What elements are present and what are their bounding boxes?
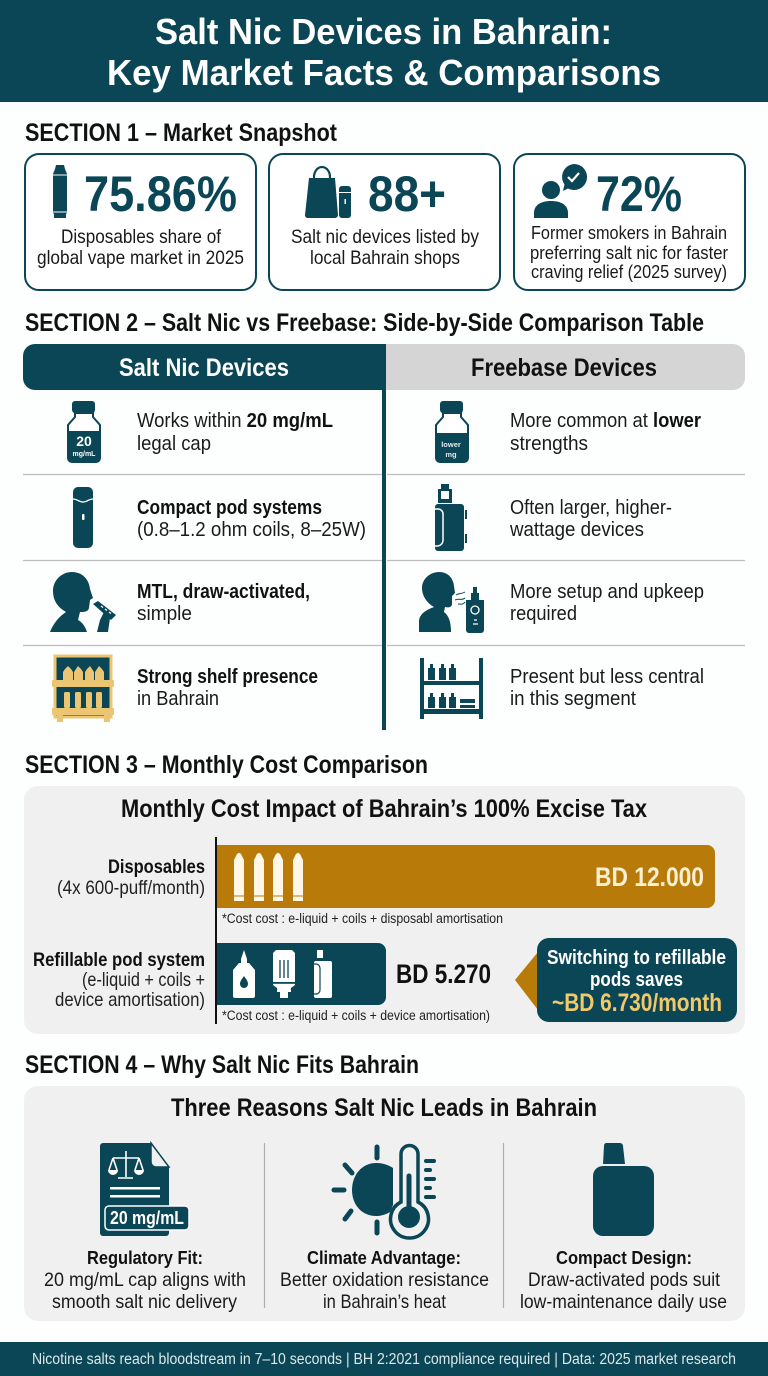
panel: monthly cost chart: [24, 786, 745, 1034]
icon: regulation document: 20 mg/mL: [110, 1208, 184, 1228]
row 1 freebase: icon bottle lower mg: mg: [445, 450, 457, 459]
reason text: compact design: [520, 1247, 727, 1313]
title banner: [0, 0, 768, 102]
row 1 freebase: text: [510, 409, 701, 455]
comparison table: [23, 344, 745, 730]
row 1 salt: icon bottle 20 mg/mL: mg/mL: [73, 451, 96, 458]
row 4 freebase: text: [510, 665, 704, 710]
heading: section 1: SECTION 1 – Market Snapshot: [25, 119, 338, 147]
column header: freebase: [386, 344, 745, 390]
row 4 salt: text: in Bahrain: [137, 687, 219, 710]
label: disposables: (4x 600-puff/month): [57, 877, 205, 899]
bar: disposables BD 12.000: [217, 845, 715, 908]
row 2 freebase: text: wattage devices: [509, 518, 644, 541]
panel: stat former smokers: [514, 154, 745, 290]
chart title: Monthly Cost Impact of Bahrain’s 100% Excise Tax: [121, 795, 647, 823]
row 1 salt: icon bottle 20 mg/mL: [68, 401, 100, 462]
row 1 salt: icon bottle 20 mg/mL: 20: [76, 433, 92, 449]
row 1 freebase: text: More common at lower: [510, 409, 701, 432]
panel title: Three Reasons Salt Nic Leads in Bahrain: [171, 1094, 597, 1122]
description: preferring salt nic for faster: [530, 242, 728, 263]
row 2 salt: icon pod: [73, 487, 93, 548]
row 2 salt: text: [137, 496, 366, 541]
reason text: compact design: Compact Design:: [556, 1247, 692, 1268]
icon: compact device: [593, 1143, 654, 1236]
row 1 freebase: icon bottle lower mg: [436, 401, 468, 462]
reason text: climate advantage: Climate Advantage:: [307, 1247, 461, 1268]
description: [530, 222, 728, 282]
row 2 salt: text: (0.8–1.2 ohm coils, 8–25W): [137, 518, 366, 541]
stat: 88+: 88+: [368, 166, 446, 222]
reason text: regulatory fit: Regulatory Fit:: [87, 1247, 203, 1268]
description: global vape market in 2025: [37, 247, 244, 269]
label: refillable pod system: [33, 949, 205, 1011]
row 3 freebase: icon person exhaling with mod: [419, 572, 484, 633]
row 3 freebase: text: More setup and upkeep: [510, 580, 704, 603]
row 1 salt: text: legal cap: [137, 432, 211, 455]
icon: disposable vape: [53, 165, 67, 218]
row 4 salt: text: [137, 665, 318, 710]
description: craving relief (2025 survey): [531, 261, 727, 282]
callout: savings: ~BD 6.730/month: [552, 989, 722, 1017]
label: refillable pod system: Refillable pod system: [33, 949, 205, 971]
row 4 salt: icon gold shelf: [52, 656, 114, 722]
reason text: regulatory fit: 20 mg/mL cap aligns with: [44, 1269, 246, 1291]
reason text: regulatory fit: smooth salt nic delivery: [52, 1291, 237, 1313]
icon: shopping bag with device: [305, 167, 351, 218]
title banner: Salt Nic Devices in Bahrain:: [155, 11, 612, 52]
description: Former smokers in Bahrain: [531, 222, 727, 243]
label: disposables: Disposables: [108, 856, 205, 878]
row 3 salt: text: MTL, draw-activated,: [137, 580, 310, 603]
row 3 salt: text: simple: [137, 602, 192, 625]
row 2 salt: text: Compact pod systems: [137, 496, 322, 519]
column header: salt nic: [23, 344, 386, 390]
title banner: Key Market Facts & Comparisons: [107, 52, 661, 93]
icon: e-liquid bottle: [233, 950, 255, 998]
callout: savings: Switching to refillable: [547, 947, 726, 969]
footnote: disposables: *Cost cost : e-liquid + coils + disposabl amortisation: [222, 911, 503, 926]
column header: freebase: Freebase Devices: [471, 354, 657, 382]
row 1 salt: text: [137, 409, 333, 455]
row 1 freebase: icon bottle lower mg: lower: [441, 440, 461, 449]
column header: salt nic: Salt Nic Devices: [119, 354, 289, 382]
row 3 salt: icon person with pod: [50, 572, 116, 632]
footnote: refillable: *Cost cost : e-liquid + coils + device amortisation): [222, 1008, 490, 1023]
row 2 freebase: text: Often larger, higher-: [510, 496, 672, 519]
row 3 salt: text: [137, 580, 310, 625]
row 4 freebase: text: in this segment: [510, 687, 636, 710]
callout: savings: pods saves: [590, 969, 683, 991]
row 1 freebase: text: strengths: [510, 432, 588, 455]
label: disposables: [57, 856, 205, 899]
value: BD 5.270: BD 5.270: [396, 959, 491, 989]
reason text: climate advantage: [280, 1247, 489, 1313]
stat: 72%: 72%: [596, 166, 682, 222]
stat: 75.86%: 75.86%: [84, 166, 237, 222]
description: [37, 226, 244, 269]
row 4 salt: text: Strong shelf presence: [137, 665, 318, 688]
bar: disposables BD 12.000: BD 12.000: [595, 862, 704, 892]
footer banner: [0, 1342, 768, 1376]
icon: sun and thermometer: [334, 1146, 434, 1238]
label: refillable pod system: (e-liquid + coils +: [82, 969, 205, 991]
bar: refillable pods: [217, 943, 386, 1005]
description: [291, 226, 479, 269]
icon: regulation document: [100, 1143, 189, 1236]
callout: savings: [537, 938, 737, 1022]
panel: stat disposables share: [25, 154, 256, 290]
icon: coil: [272, 950, 296, 998]
panel: three reasons: [24, 1086, 745, 1321]
description: Disposables share of: [61, 226, 222, 248]
reason text: regulatory fit: [44, 1247, 246, 1313]
arrow: savings pointer: [515, 952, 538, 1010]
row 4 freebase: icon shelf: [420, 658, 483, 719]
description: Salt nic devices listed by: [291, 226, 479, 248]
description: local Bahrain shops: [310, 247, 460, 269]
icon: four disposables: [234, 853, 303, 901]
reason text: climate advantage: Better oxidation resistance: [280, 1269, 489, 1291]
reason text: compact design: Draw-activated pods suit: [528, 1269, 721, 1291]
reason text: compact design: low-maintenance daily use: [520, 1291, 727, 1313]
row 1 salt: text: Works within 20 mg/mL: [137, 409, 333, 432]
row 3 freebase: text: required: [510, 602, 577, 625]
label: refillable pod system: device amortisation): [55, 989, 205, 1011]
row 4 freebase: text: Present but less central: [510, 665, 704, 688]
row 2 freebase: icon box mod: [435, 484, 467, 551]
icon: person with check bubble: [534, 164, 587, 218]
panel: stat devices listed: [269, 154, 500, 290]
reason text: climate advantage: in Bahrain’s heat: [323, 1291, 446, 1313]
icon: box mod: [314, 950, 332, 998]
heading: section 3: SECTION 3 – Monthly Cost Comparison: [25, 751, 428, 779]
row 3 freebase: text: [510, 580, 704, 625]
heading: section 4: SECTION 4 – Why Salt Nic Fits Bahrain: [25, 1051, 419, 1079]
row 2 freebase: text: [509, 496, 672, 541]
